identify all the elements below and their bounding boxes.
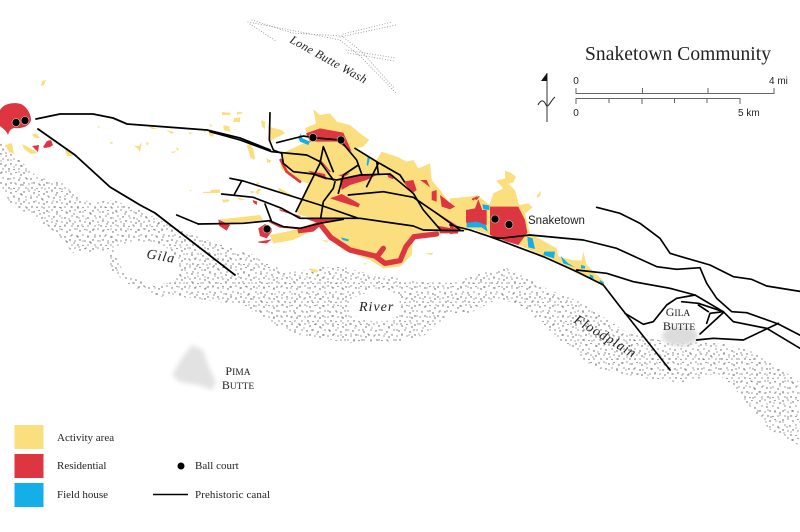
label: Snaketown: Snaketown [528, 215, 585, 227]
legend: activity area [14, 425, 114, 449]
ball courts [263, 134, 513, 233]
legend [14, 425, 270, 507]
Snaketown residential blocks [450, 196, 527, 245]
ball courts west [12, 116, 29, 126]
legend: prehistoric canal [153, 489, 270, 501]
scale bar: 0 [573, 76, 579, 87]
legend: field house: Field house [57, 489, 108, 501]
legend: activity area: Activity area [57, 432, 114, 444]
Gila Butte shading [662, 326, 698, 346]
legend: field house [14, 483, 108, 507]
west outlying settlement [0, 103, 73, 156]
title: Snaketown Community [585, 44, 771, 65]
label: Gila Butte: GILA [666, 305, 690, 319]
scale bar [573, 76, 788, 119]
north arrow [538, 73, 555, 122]
Lone Butte Wash stipple [248, 20, 396, 93]
scattered activity patches west [41, 80, 270, 203]
legend: residential [14, 454, 106, 478]
label: Floodplain: Floodplain [570, 312, 639, 362]
floodplain stipple [0, 142, 800, 446]
label: Lone Butte Wash: Lone Butte Wash [287, 32, 370, 86]
label: River: River [358, 300, 394, 315]
label: Pima Butte: BUTTE [222, 378, 254, 392]
main activity area [270, 109, 480, 268]
Pima Butte shading [172, 345, 216, 390]
legend: residential: Residential [57, 460, 106, 472]
activity patches around core [210, 112, 433, 273]
east canal network [450, 207, 800, 370]
legend: ball court: Ball court [195, 460, 239, 472]
legend: prehistoric canal: Prehistoric canal [195, 489, 270, 501]
scale bar: 4 mi [769, 76, 788, 87]
central canal network [177, 113, 463, 231]
west canals [36, 114, 270, 275]
Snaketown activity extension [450, 171, 604, 285]
label: Gila Butte: BUTTE [663, 319, 695, 333]
residential bands [218, 128, 480, 243]
scale bar: 5 km [738, 108, 760, 119]
scale bar: 0 [573, 108, 579, 119]
field houses [298, 133, 604, 285]
label: Gila: Gila [145, 247, 176, 267]
label: Pima Butte: PIMA [225, 364, 251, 378]
